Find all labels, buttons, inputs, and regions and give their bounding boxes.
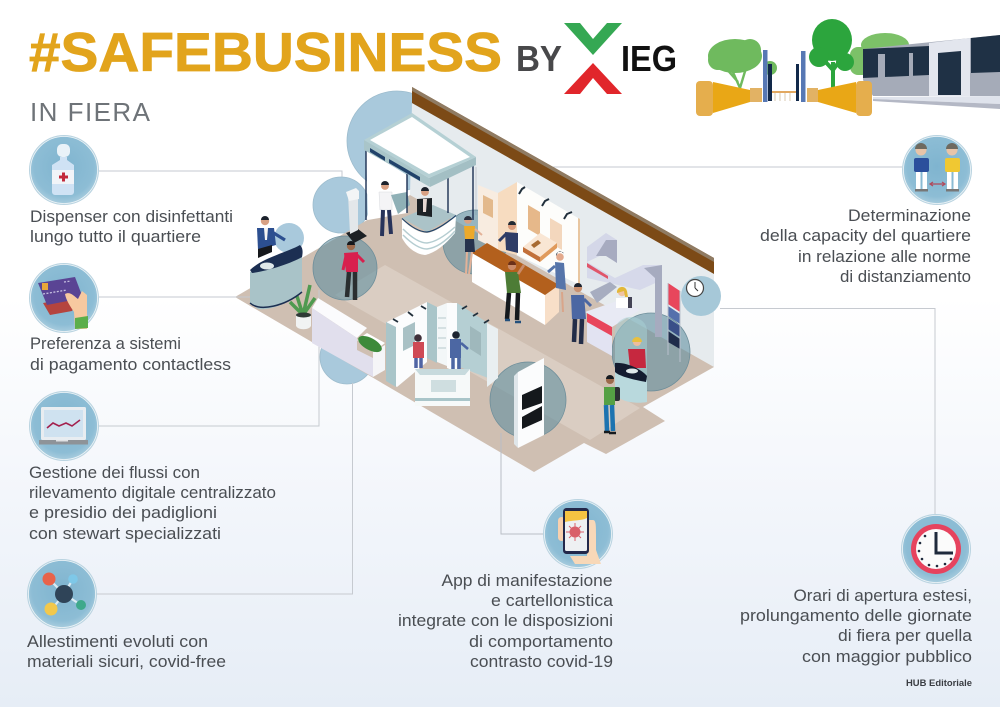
text: payment — [30, 335, 231, 374]
front booth: desk — [402, 205, 456, 255]
booth back panel — [366, 150, 407, 220]
connector: capacity — [476, 166, 902, 168]
connector: gestione flussi — [99, 290, 319, 426]
booth screen — [391, 192, 410, 214]
person: woman in yellow — [464, 216, 482, 274]
text: dispenser — [30, 208, 233, 246]
floor aisle — [335, 265, 640, 440]
text: payment: di pagamento contactless — [30, 356, 231, 374]
kiosk with attendant — [615, 317, 647, 403]
connector: materials — [97, 383, 352, 594]
highlight circles over the floor — [313, 210, 690, 438]
text: app: di comportamento — [469, 633, 613, 651]
person: booth attendant — [417, 187, 432, 217]
back booth stand — [478, 182, 580, 285]
person: man in white shirt — [379, 181, 392, 236]
text: app: App di manifestazione — [442, 572, 612, 590]
text: app: e cartellonistica — [491, 592, 614, 610]
person: sales assistant — [499, 221, 518, 253]
person: blonde receptionist — [616, 287, 632, 308]
potted plant — [290, 285, 315, 329]
text: materials — [27, 633, 226, 671]
text: materials: materiali sicuri, covid-free — [27, 653, 226, 671]
text: app — [398, 572, 614, 671]
text: capacity: Determinazione — [848, 207, 971, 225]
icon: clock — [901, 514, 971, 584]
text: opening hours — [740, 587, 973, 666]
text: materials: Allestimenti evoluti con — [27, 633, 208, 651]
text: opening hours: prolungamento delle giornate — [740, 607, 972, 625]
connector: dispenser — [99, 171, 342, 178]
central stand — [386, 302, 498, 406]
text: app: integrate con le disposizioni — [398, 612, 613, 630]
text: payment: Preferenza a sistemi — [30, 335, 181, 353]
logo: by IEG: IEG — [621, 38, 677, 79]
exhibition hall: floor — [235, 195, 714, 472]
title: #SAFEBUSINESS — [29, 21, 502, 83]
credit: HUB Editoriale — [906, 678, 972, 688]
dispenser post — [346, 188, 367, 243]
connector: payment — [99, 296, 287, 298]
icon: molecule — [27, 559, 97, 629]
connector: app — [501, 433, 544, 534]
icon: two people distancing — [902, 135, 972, 205]
text: opening hours: con maggior pubblico — [802, 648, 972, 666]
text: gestione flussi: e presidio dei padiglioni — [29, 504, 217, 522]
icon: smartphone app — [543, 499, 613, 569]
highlight circles behind the scene — [274, 91, 447, 384]
text: gestione flussi: con stewart specializzati — [29, 525, 221, 543]
text: gestione flussi: rilevamento digitale centralizzato — [29, 484, 276, 502]
text: opening hours: di fiera per quella — [838, 627, 973, 645]
right booth stand — [585, 233, 680, 362]
text: dispenser: Dispenser con disinfettanti — [30, 208, 233, 226]
text: gestione flussi — [29, 464, 276, 543]
connector: opening hours — [720, 308, 935, 514]
person: woman in blue — [548, 251, 566, 312]
text: app: contrasto covid-19 — [470, 653, 613, 671]
exhibition hall: wooden beam — [412, 87, 714, 274]
reception desk left — [250, 216, 303, 309]
low wall with planter — [312, 298, 385, 377]
digital totem — [514, 358, 544, 448]
icon: laptop chart — [29, 391, 99, 461]
icon: sanitizer bottle — [29, 135, 99, 205]
text: dispenser: lungo tutto il quartiere — [30, 228, 201, 246]
text: opening hours: Orari di apertura estesi, — [794, 587, 972, 605]
person: man in red — [343, 241, 364, 300]
connector: capacity drop — [475, 167, 477, 215]
central counter — [472, 243, 559, 325]
text: capacity: della capacity del quartiere — [760, 227, 971, 245]
illustration: fair entrance and pavilion — [696, 19, 1000, 116]
exhibition hall: back wall — [410, 103, 714, 367]
subtitle: IN FIERA — [30, 97, 151, 127]
person: man at desk — [571, 283, 591, 344]
front booth: canopy — [364, 113, 476, 220]
icon: payment cards — [29, 263, 99, 333]
text: capacity: di distanziamento — [840, 268, 971, 286]
logo: by IEG: BY — [516, 38, 562, 79]
logo: by IEG — [516, 23, 677, 94]
text: capacity — [760, 207, 971, 286]
person: man in green — [505, 261, 524, 322]
text: gestione flussi: Gestione dei flussi con — [29, 464, 200, 482]
person: visitor with backpack — [604, 375, 620, 433]
text: capacity: in relazione alle norme — [798, 248, 971, 266]
clock highlight circle — [681, 276, 721, 316]
wall clock — [686, 280, 704, 296]
